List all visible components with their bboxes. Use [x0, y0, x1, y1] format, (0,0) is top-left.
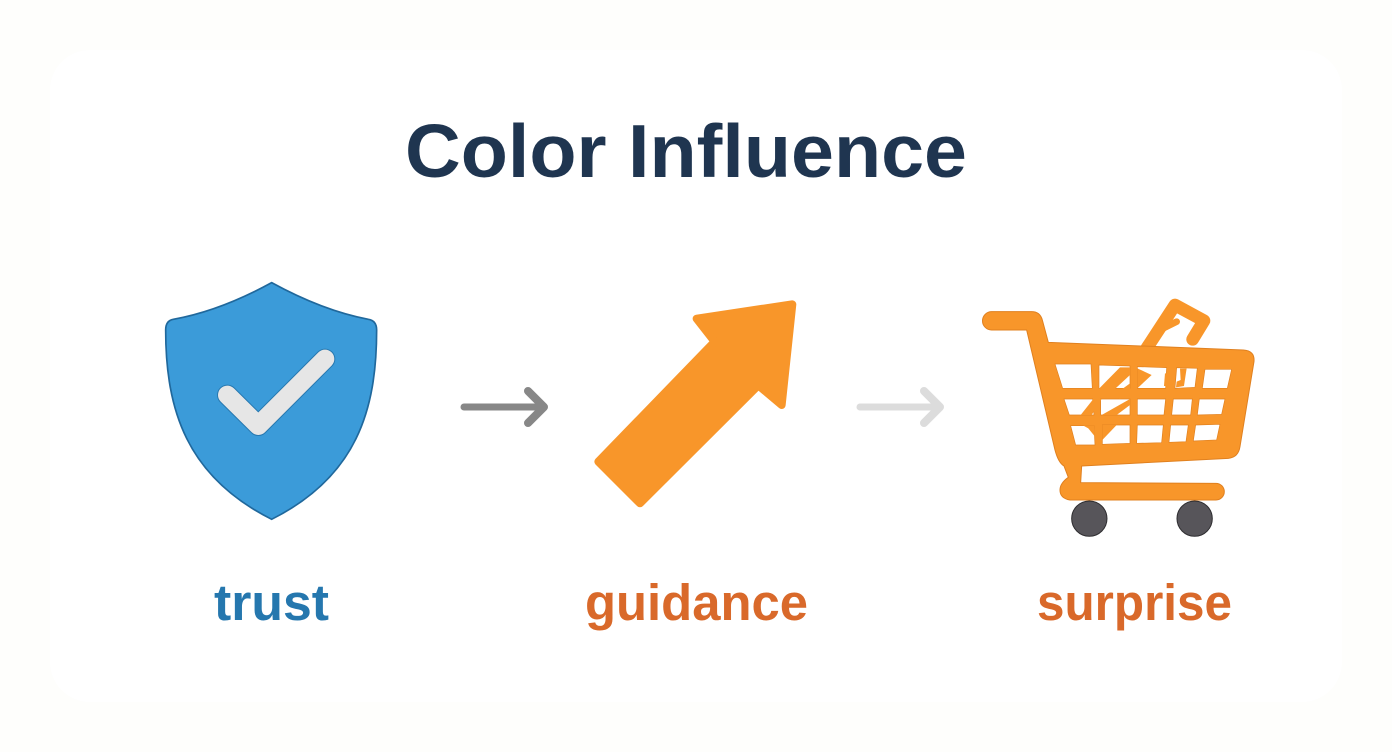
label: guidance: guidance [585, 574, 808, 631]
label: surprise: surprise [1037, 574, 1232, 631]
cart wheels [1072, 501, 1212, 536]
arrow: guidance to surprise [860, 391, 940, 423]
icon: guidance diagonal arrow [598, 304, 792, 503]
title: Color Influence [405, 109, 967, 193]
cart item handle [1147, 305, 1204, 348]
item seen through the grid [1081, 367, 1187, 440]
icon: shopping cart [982, 305, 1254, 536]
icon: trust shield with check mark [166, 283, 377, 519]
cart handle, frame and base [982, 312, 1254, 500]
cart grid cells [1055, 364, 1232, 445]
label: trust: trust [214, 574, 329, 631]
arrow: trust to guidance [464, 391, 544, 423]
